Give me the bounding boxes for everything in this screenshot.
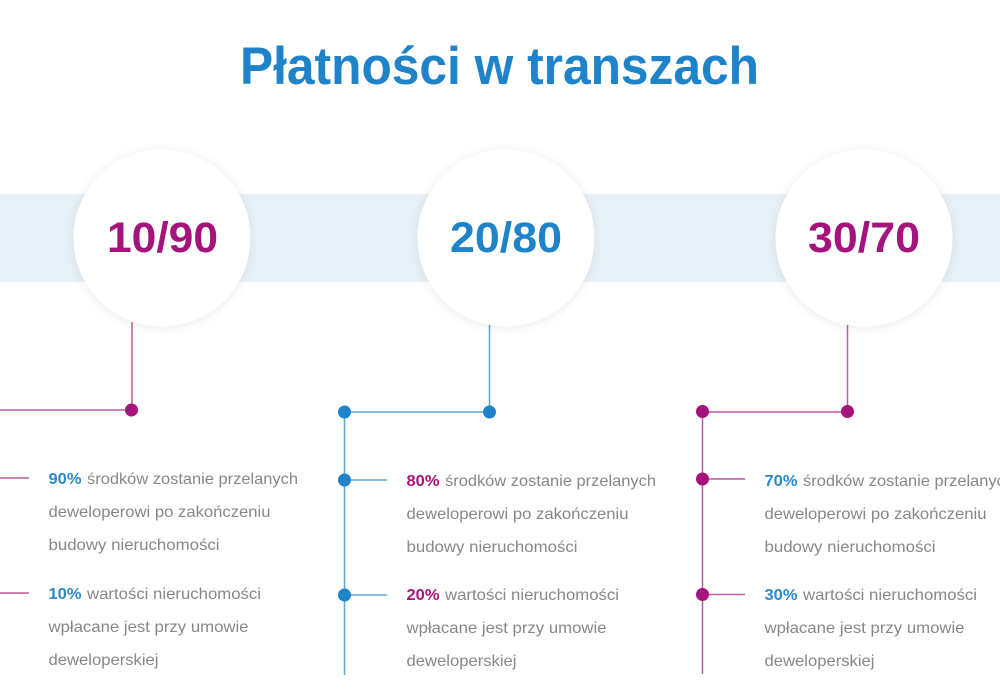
text: 30%: wartości nieruchomości bbox=[802, 587, 977, 604]
text: 70%: deweloperowi po zakończeniu bbox=[764, 506, 986, 523]
text: 80%: 80% bbox=[406, 473, 440, 490]
text: 20%: wpłacane jest przy umowie bbox=[405, 620, 607, 637]
panel: 20/80 bbox=[338, 150, 656, 675]
nodes bbox=[696, 405, 854, 601]
text: 30%: deweloperskiej bbox=[764, 653, 874, 670]
text: 10% bbox=[47, 586, 261, 669]
nodes bbox=[338, 406, 496, 602]
text: 30%: wpłacane jest przy umowie bbox=[763, 620, 965, 637]
text: 20%: 20% bbox=[406, 587, 440, 604]
text: 10%: wpłacane jest przy umowie bbox=[47, 619, 249, 636]
text: 70%: budowy nieruchomości bbox=[764, 539, 936, 556]
title: Płatności w transzach bbox=[240, 37, 759, 96]
text: 90%: 90% bbox=[48, 471, 82, 488]
text: 80% bbox=[406, 473, 656, 556]
circle: 20/80 bbox=[418, 150, 594, 326]
text: 90%: deweloperowi po zakończeniu bbox=[48, 504, 270, 521]
text: 10%: 10% bbox=[48, 586, 82, 603]
text: 70%: 70% bbox=[764, 473, 798, 490]
text: 30%: 30% bbox=[764, 587, 798, 604]
text: 10%: deweloperskiej bbox=[48, 652, 158, 669]
text: 20% bbox=[405, 587, 619, 670]
text: 20%: wartości nieruchomości bbox=[444, 587, 619, 604]
connector: 10/90 bbox=[0, 322, 132, 593]
text: 70% bbox=[764, 473, 1000, 556]
timeline band bbox=[0, 194, 1000, 282]
text: 30% bbox=[763, 587, 977, 670]
circle: 10/90 bbox=[74, 150, 250, 326]
text: 90%: środków zostanie przelanych bbox=[87, 471, 298, 488]
rate: 30/70: 30/70 bbox=[808, 214, 920, 262]
circle: 30/70 bbox=[776, 150, 952, 326]
text: 80%: środków zostanie przelanych bbox=[445, 473, 656, 490]
text: 90% bbox=[48, 471, 298, 554]
text: 90%: budowy nieruchomości bbox=[48, 537, 220, 554]
node bbox=[125, 404, 138, 416]
panel: 30/70 bbox=[696, 150, 1000, 674]
panel: 10/90 bbox=[0, 150, 298, 669]
rate: 10/90: 10/90 bbox=[107, 214, 218, 262]
text: 10%: wartości nieruchomości bbox=[86, 586, 261, 603]
text: 80%: budowy nieruchomości bbox=[406, 539, 578, 556]
rate: 20/80: 20/80 bbox=[450, 214, 562, 262]
connector: 20/80 bbox=[344, 325, 490, 675]
connector: 30/70 bbox=[702, 325, 848, 674]
text: 80%: deweloperowi po zakończeniu bbox=[406, 506, 628, 523]
text: 20%: deweloperskiej bbox=[406, 653, 516, 670]
